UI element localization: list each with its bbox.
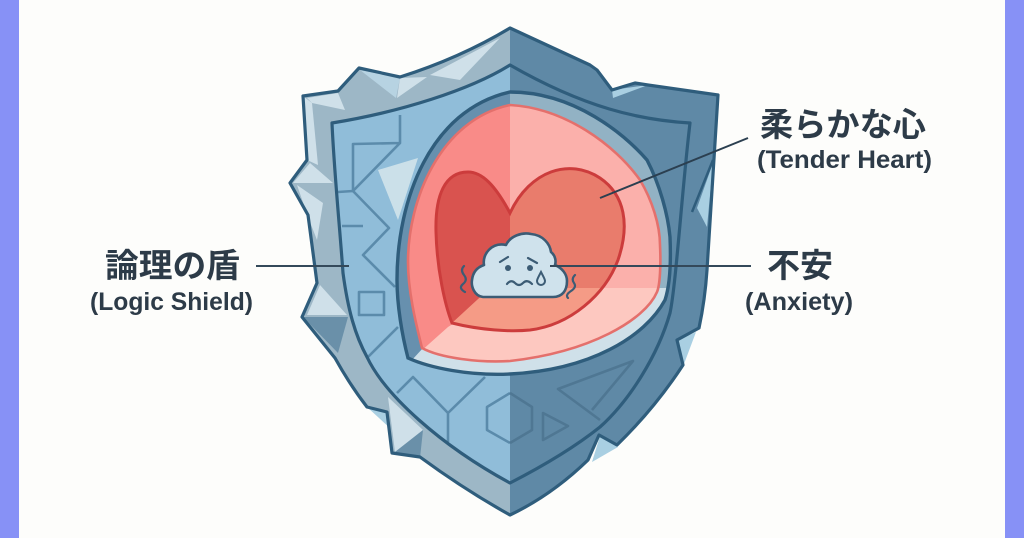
engraved geometric pattern bbox=[338, 115, 633, 443]
shield bbox=[280, 20, 730, 520]
anxiety cloud bbox=[461, 233, 575, 298]
tear bbox=[537, 272, 545, 285]
label: tender heart bbox=[757, 98, 932, 174]
right side band bbox=[1005, 0, 1024, 538]
label: tender heart: (Tender Heart) bbox=[757, 146, 932, 174]
recess rim bbox=[398, 94, 669, 373]
inner shield plate bbox=[334, 67, 510, 481]
label: anxiety: (Anxiety) bbox=[745, 288, 853, 316]
leader line: anxiety bbox=[550, 265, 751, 267]
inner shield outline bbox=[332, 65, 690, 483]
red chamber bbox=[409, 106, 660, 360]
outer outline bbox=[290, 28, 718, 515]
outer facets beyond the outline bbox=[367, 332, 696, 462]
brows, mouth and shake lines bbox=[461, 257, 575, 298]
label: logic shield bbox=[90, 239, 253, 316]
leader line: logic shield bbox=[256, 265, 349, 267]
leader line: tender heart bbox=[600, 138, 748, 198]
left side band bbox=[0, 0, 19, 538]
eyes bbox=[505, 265, 533, 271]
label: anxiety: 不安 bbox=[767, 239, 833, 287]
label: logic shield: 論理の盾 bbox=[105, 239, 240, 287]
chamber outline bbox=[408, 105, 660, 361]
heart bbox=[434, 167, 626, 332]
recess outline bbox=[397, 92, 670, 374]
label: anxiety bbox=[745, 239, 853, 316]
label: logic shield: (Logic Shield) bbox=[90, 288, 253, 316]
outer rock layer bbox=[280, 20, 730, 520]
label: tender heart: 柔らかな心 bbox=[760, 98, 926, 146]
right rock crack bbox=[692, 160, 713, 212]
